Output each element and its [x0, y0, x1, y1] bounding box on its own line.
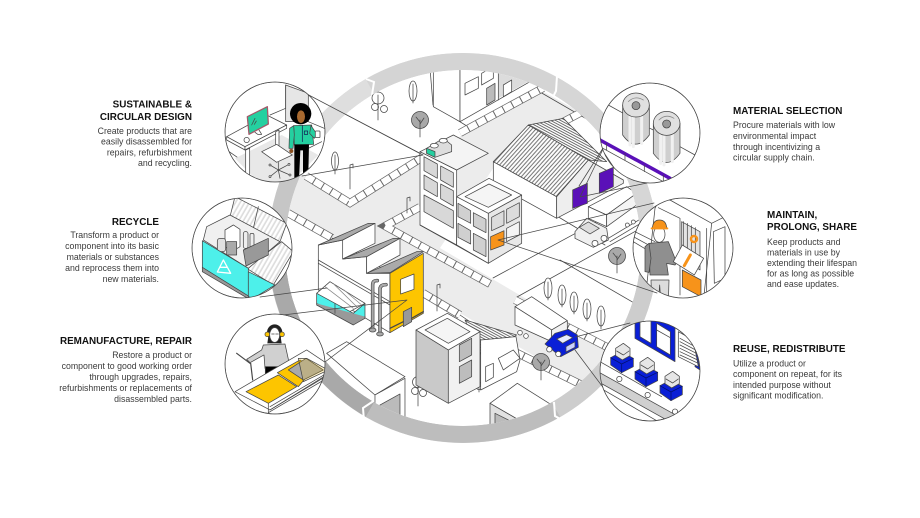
- cylinder two: [653, 111, 680, 165]
- text: remanufacture, repair: [59, 336, 193, 404]
- orange gear: [691, 236, 697, 242]
- cyan panels: [202, 241, 275, 299]
- sidewalks: [288, 88, 607, 385]
- circle outline: remanufacture: [225, 314, 325, 414]
- text: recycle: Transform a product or: [70, 230, 159, 240]
- text: remanufacture, repair: Restore a product or: [112, 350, 192, 360]
- road lines: [332, 73, 636, 321]
- text: material selection: [733, 106, 842, 162]
- chair: [262, 144, 292, 178]
- panel: material circle: [600, 83, 700, 187]
- text: sustainable and circular design: SUSTAINABLE &: [113, 100, 192, 110]
- blue window frames: [635, 320, 700, 370]
- text: recycle: materials or substances: [67, 252, 160, 262]
- factory with yellow facade: [317, 223, 423, 336]
- text: reuse, redistribute: REUSE, REDISTRIBUTE: [733, 344, 846, 355]
- central office building: [420, 135, 522, 263]
- monitor: [247, 107, 268, 134]
- text: remanufacture, repair: component to good working order: [62, 361, 192, 371]
- trees and street lamps: [332, 81, 626, 406]
- white truck: [575, 187, 641, 247]
- box three: [660, 371, 682, 401]
- text: material selection: Procure materials with low: [733, 120, 836, 130]
- text: remanufacture, repair: through upgrades, repairs,: [89, 372, 192, 382]
- text: sustainable and circular design: easily disassembled for: [101, 136, 192, 146]
- text: remanufacture, repair: refurbishments or replacements of: [59, 383, 193, 393]
- circle outline: material: [600, 83, 700, 183]
- text: reuse, redistribute: [733, 344, 846, 400]
- warehouse with purple doors: [493, 118, 623, 218]
- text: remanufacture, repair: disassembled parts.: [114, 394, 192, 404]
- lower-centre building: [490, 382, 550, 424]
- circle outline: reuse: [600, 321, 700, 421]
- orange panel: [682, 270, 701, 297]
- cylinder one: [623, 93, 649, 147]
- ground and roads: [286, 72, 639, 426]
- text: reuse, redistribute: component on repeat, for its: [733, 369, 843, 379]
- text: sustainable and circular design: Create products that are: [98, 126, 192, 136]
- lower-left building: [326, 341, 406, 416]
- text: maintain, prolong, share: for as long as possible: [767, 268, 854, 278]
- connector lines: [260, 92, 657, 390]
- panel: reuse circle: [600, 321, 700, 421]
- materials bin interior: [203, 215, 280, 268]
- circle outline: maintain: [633, 198, 733, 298]
- text: recycle: and reprocess them into: [65, 263, 159, 273]
- person with phone: [289, 103, 320, 181]
- welding torch: [237, 353, 253, 380]
- technician: [644, 220, 676, 296]
- text: reuse, redistribute: intended purpose without: [733, 380, 831, 390]
- text: maintain, prolong, share: materials in use by: [767, 248, 841, 258]
- circular loop ring: [276, 62, 650, 434]
- blue truck: [515, 297, 578, 357]
- text: recycle: RECYCLE: [112, 217, 159, 228]
- text: recycle: component into its basic: [65, 241, 160, 251]
- workbench with yellow panels: [235, 350, 327, 413]
- text: material selection: through incentivizing a: [733, 142, 820, 152]
- conveyor belt: [600, 362, 678, 420]
- text: reuse, redistribute: significant modification.: [733, 390, 823, 400]
- text: maintain, prolong, share: PROLONG, SHARE: [767, 222, 857, 233]
- worker with headphones: [247, 324, 290, 375]
- circle outline: design: [225, 82, 325, 182]
- recycle symbol: [217, 260, 231, 273]
- text: sustainable and circular design: repairs, refurbishment: [107, 148, 193, 158]
- text: sustainable and circular design: CIRCULAR DESIGN: [100, 112, 192, 123]
- text: reuse, redistribute: Utilize a product or: [733, 358, 806, 368]
- box two: [635, 357, 658, 387]
- desk: [227, 115, 287, 175]
- clipboard with wrench: [673, 245, 704, 275]
- right-middle building: [416, 313, 520, 403]
- rooftop AC unit: [427, 138, 452, 157]
- equipment cabinet: [633, 200, 732, 302]
- panel: recycle circle: [192, 197, 293, 299]
- purple roof strip: [600, 105, 695, 187]
- text: sustainable and circular design: [98, 100, 193, 168]
- text: maintain, prolong, share: extending their lifespan: [767, 258, 857, 268]
- office wall and floor: [227, 85, 328, 182]
- panel: design circle: [225, 82, 328, 182]
- box one: [611, 343, 633, 373]
- top building: [432, 70, 529, 122]
- text: sustainable and circular design: and recycling.: [138, 158, 192, 168]
- text: material selection: circular supply chain.: [733, 152, 815, 162]
- circle outline: recycle: [192, 198, 292, 298]
- text: maintain, prolong, share: and ease updates.: [767, 279, 839, 289]
- text: material selection: MATERIAL SELECTION: [733, 106, 842, 117]
- text: recycle: new materials.: [103, 274, 159, 284]
- panel: maintain circle: [633, 198, 733, 303]
- striped roof: [230, 197, 293, 285]
- text: remanufacture, repair: REMANUFACTURE, REPAIR: [60, 336, 192, 347]
- panel: remanufacture circle: [225, 314, 327, 414]
- city scene: [286, 70, 639, 426]
- text: maintain, prolong, share: Keep products and: [767, 237, 841, 247]
- text: maintain, prolong, share: [767, 210, 857, 289]
- text: maintain, prolong, share: MAINTAIN,: [767, 210, 818, 221]
- text: material selection: environmental impact: [733, 131, 817, 141]
- text: recycle: [65, 217, 160, 284]
